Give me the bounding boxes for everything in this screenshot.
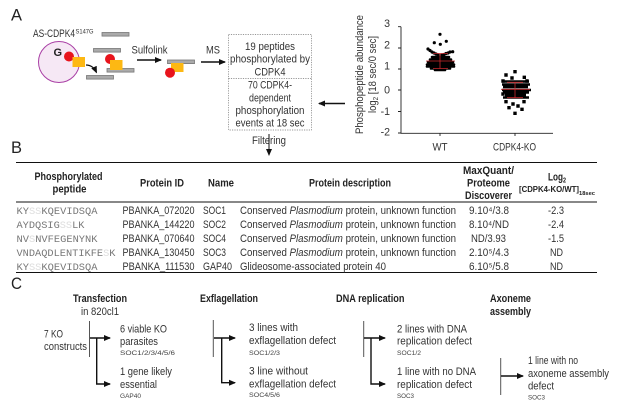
label: Sulfolink: Sulfolink [132,44,168,56]
row: GAP40: PBANKA_111530 [122,261,195,273]
column: exflagellation: SOC4/5/6 [249,392,280,399]
table header: Name [208,178,234,190]
y axis title [354,15,380,134]
results box: 70 CDPK4- [248,80,292,92]
y axis title: log [367,99,379,113]
row: SOC3: ND [550,247,563,259]
row: SOC4 [16,233,564,246]
row: SOC2: Conserved Plasmodium protein, unknown function [240,219,456,231]
y axis title: [18 sec/0 sec] [367,36,379,97]
column: exflagellation: 3 line without [249,366,308,378]
column: axoneme assembly [490,293,610,402]
arrow: to MS [201,61,225,63]
y tick labels: 0 [384,84,390,96]
table header: Discoverer [465,190,512,202]
row: SOC3: SOC3 [203,247,226,259]
column: exflagellation: 3 lines with [249,322,298,334]
table header: MaxQuant/ [463,165,514,177]
axes [398,27,553,136]
KO swarm [502,82,531,98]
column: transfection: 6 viable KO [120,324,167,336]
panel letter C: C [11,274,22,293]
column: DNA replication: replication defect [397,379,472,391]
row: SOC2: AYDQSIGSSLK [16,220,85,232]
row: SOC3: PBANKA_130450 [122,247,195,259]
row: SOC1: SOC1 [203,205,226,217]
WT swarm [427,57,454,70]
row: SOC1: -2.3 [548,205,564,217]
y tick labels: 2 [384,40,390,52]
column: exflagellation [200,293,336,399]
row: GAP40: GAP40 [203,261,232,273]
table header: Protein ID [140,178,184,190]
column: transfection [44,293,175,400]
row: SOC3: VNDAQDLENTIKFESK [16,248,116,260]
row: SOC4: -1.5 [548,233,564,245]
arrow: plot to box [319,102,345,104]
column: DNA replication: SOC1/2 [397,350,421,357]
column: exflagellation: SOC1/2/3 [249,350,280,357]
column: exflagellation: exflagellation defect [249,335,336,347]
column: DNA replication: 1 line with no DNA [397,366,477,378]
row: SOC1: PBANKA_072020 [122,205,195,217]
table header: Phosphorylated [34,171,102,183]
panel letter A: A [11,6,23,24]
column: exflagellation: Exflagellation [200,293,258,305]
column: transfection: constructs [44,341,87,353]
WT mean and SD [426,54,455,68]
results box: dependent [249,92,291,104]
row: SOC4: Conserved Plasmodium protein, unknown function [240,233,456,245]
column: transfection: 7 KO [44,328,63,340]
row: GAP40: 6.10⁵/5.8 [469,261,509,273]
arrow: to sulfolink [137,59,161,61]
table header: Proteome [467,178,510,190]
row: GAP40 [16,261,563,274]
diagram: kinase cell [38,42,96,82]
x labels: CDPK4-KO [493,142,536,154]
results box: CDPK4 [254,66,286,78]
column: transfection: SOC1/2/3/4/5/6 [120,350,175,357]
results box: phosphorylation [236,105,305,117]
table header [34,165,595,202]
column: axoneme assembly: axoneme assembly [528,368,610,380]
row: SOC2: SOC2 [203,219,226,231]
diagram: phosphorylated peptide [105,54,122,70]
row: GAP40: Glideosome-associated protein 40 [240,261,386,273]
row: SOC2 [16,219,564,232]
y tick labels: 3 [384,18,390,30]
column: DNA replication: SOC3 [397,393,414,400]
label: AS-CDPK4 S147G: AS-CDPK4 [33,28,75,40]
panel C: flow [11,274,610,402]
table header: 2 [563,178,566,184]
row: GAP40: ND [550,261,563,273]
column: exflagellation: exflagellation defect [249,378,336,390]
row: SOC1: KYSSKQEVIDSQA [16,206,98,218]
panel letter B: B [11,138,22,157]
row: SOC4: PBANKA_070640 [122,233,195,245]
row: SOC3 [16,247,563,260]
scatter plot [354,15,553,154]
column: axoneme assembly: SOC3 [528,394,545,402]
diagram: peptide bars [86,32,134,79]
row: SOC4: SOC4 [203,233,226,245]
KO points [503,72,527,113]
row: GAP40: KYSSKQEVIDSQA [16,262,98,274]
results box: events at 18 sec [236,118,305,130]
column: axoneme assembly: defect [528,380,554,392]
panel A [11,6,345,155]
column: DNA replication [336,293,477,400]
table header: [CDPK4-KO/WT] [519,185,579,194]
column: transfection: parasites [120,336,158,348]
row: SOC1: Conserved Plasmodium protein, unknown function [240,205,456,217]
column: axoneme assembly: Axoneme [490,293,531,305]
column: DNA replication: replication defect [397,336,472,348]
row: SOC1: 9.10⁴/3.8 [469,205,509,217]
column: DNA replication: DNA replication [336,293,404,305]
results box: 19 peptides [245,41,295,53]
row: SOC2: -2.4 [548,219,564,231]
row: SOC4: ND/3.93 [471,233,506,245]
y tick labels: 1 [384,60,390,72]
column: axoneme assembly: assembly [490,306,531,318]
results box: phosphorylated by [230,54,311,66]
column: transfection: 1 gene likely [120,366,173,378]
row: SOC3: 2.10⁵/4.3 [469,247,509,259]
y tick labels: -2 [381,126,390,138]
results box [228,34,312,130]
label: Filtering: Filtering [252,135,286,147]
arrow: filtering down [268,134,270,155]
row: SOC2: 8.10⁴/ND [469,219,509,231]
y axis title: Phosphopeptide abundance [354,15,366,134]
column: axoneme assembly: 1 line with no [528,355,578,367]
table rules [16,162,597,272]
y axis title: 2 [373,97,380,100]
table header: Log [548,172,567,184]
row: SOC1 [16,205,564,218]
WT points [428,34,453,55]
table header: 18sec [579,191,595,197]
row: SOC4: NVSNVFEGENYNK [16,234,98,246]
column: transfection: Transfection [73,293,127,305]
y tick labels [381,18,390,138]
diagram: enriched peptide [165,60,194,78]
panel B: table [11,138,597,274]
x labels [432,142,536,154]
row: SOC2: PBANKA_144220 [122,219,195,231]
diagram: kinase cell: G [54,47,62,59]
column: DNA replication: 2 lines with DNA [397,324,468,336]
label: MS: MS [206,44,220,56]
superscript S147G: S147G [76,28,94,36]
KO mean and SD [501,82,530,98]
column: transfection: essential [120,379,157,391]
column: transfection: in 820cl1 [81,306,119,318]
column: transfection: GAP40 [120,393,141,400]
row: SOC3: Conserved Plasmodium protein, unknown function [240,247,456,259]
y tick labels: -1 [381,106,390,118]
table header: peptide [52,184,87,196]
x labels: WT [432,142,448,154]
table header: Protein description [309,178,391,190]
